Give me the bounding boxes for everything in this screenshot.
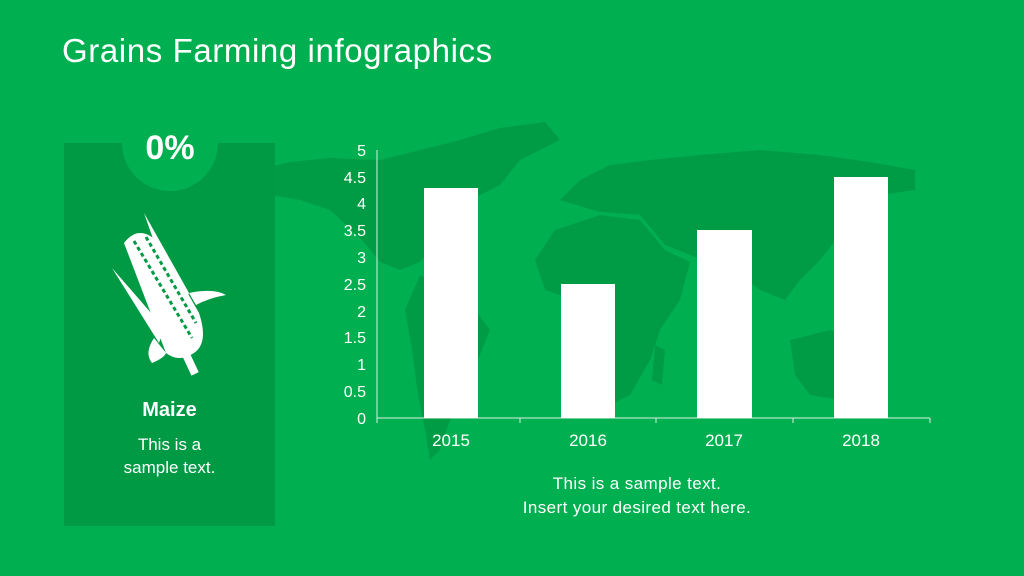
text: description (124, 435, 215, 477)
bar chart: 1.5 (344, 330, 366, 347)
panel: maize (64, 143, 275, 526)
bar chart: 2 (357, 304, 366, 321)
caption text: This is a sample text. (553, 474, 721, 493)
bar chart: 1 (357, 357, 366, 374)
percentage value: 0% (145, 129, 195, 167)
icon: corn (112, 213, 226, 376)
bar chart: 2016 (569, 431, 607, 450)
label: Maize: Maize (142, 399, 197, 421)
text: description: This is a (138, 435, 201, 454)
bar chart: 4.5 (344, 170, 366, 187)
bar chart: 2.5 (344, 277, 366, 294)
percentage circle (122, 95, 218, 191)
bar chart: 2015 (432, 431, 470, 450)
bar chart: 2017 (705, 431, 743, 450)
caption text: Insert your desired text here. (523, 498, 751, 517)
bar chart: 0 (357, 411, 366, 428)
bar chart: 2018 (842, 431, 880, 450)
bar chart: 3 (357, 250, 366, 267)
title: Grains Farming infographics (62, 32, 493, 69)
bar chart: 4 (357, 196, 366, 213)
bar chart: 0.5 (344, 384, 366, 401)
bar chart: 5 (357, 143, 366, 160)
caption text (523, 474, 751, 517)
text: description: sample text. (124, 458, 215, 477)
bar chart: 3.5 (344, 223, 366, 240)
